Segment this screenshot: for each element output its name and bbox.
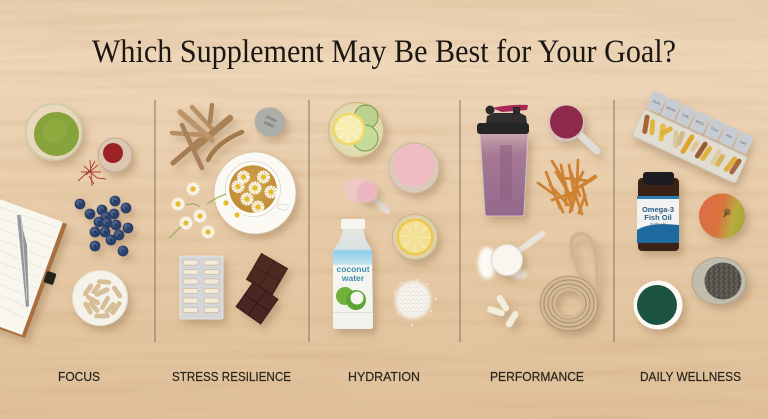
weekly pill organizer: SUN (652, 98, 661, 106)
omega-3 fish oil bottle: Fish Oil (644, 213, 672, 222)
coconut water bottle (333, 219, 373, 329)
weekly pill organizer: TUE (681, 112, 690, 120)
engraved stone: inner (265, 114, 278, 124)
cordyceps (538, 160, 596, 214)
label: stress resilience: STRESS RESILIENCE (172, 370, 291, 384)
panel: daily wellness (632, 90, 756, 384)
chamomile flowers (169, 185, 241, 238)
focus items (0, 104, 133, 338)
stress resilience items (169, 103, 296, 324)
hydration items (328, 102, 439, 329)
infused water glass (328, 102, 384, 158)
weekly pill organizer: MON (666, 105, 676, 113)
performance items (477, 104, 597, 329)
daily wellness items (632, 90, 756, 330)
matcha bowl (26, 104, 82, 160)
omega-3 fish oil bottle: Omega-3 (642, 205, 674, 214)
spirulina bowl (634, 280, 682, 330)
engraved stone (250, 103, 290, 141)
chia seed jar (692, 258, 746, 304)
pink powder scoop (345, 178, 387, 211)
weekly pill organizer: THU (710, 125, 719, 133)
panel: performance (477, 104, 597, 384)
white capsules (486, 294, 520, 328)
blueberries (75, 196, 133, 256)
title: Which Supplement May Be Best for Your Goal? (92, 34, 676, 70)
panel: stress resilience (169, 103, 296, 384)
omega-3 fish oil bottle: Softgels (650, 222, 667, 227)
saffron jar (98, 138, 132, 172)
ashwagandha roots (172, 105, 242, 168)
weekly pill organizer (632, 90, 756, 184)
creatine powder scoop (478, 234, 542, 279)
coconut water bottle: coconut (336, 264, 370, 274)
label: performance: PERFORMANCE (490, 370, 584, 384)
pink drink glass (389, 143, 439, 193)
divider lines (155, 100, 614, 342)
protein shaker (477, 105, 529, 216)
tea cup on saucer (214, 152, 296, 234)
panel: hydration (328, 102, 439, 384)
saffron threads (78, 160, 106, 186)
label: daily wellness: DAILY WELLNESS (640, 370, 741, 384)
sea salt (394, 279, 437, 326)
coconut water bottle: water (341, 273, 365, 283)
panel: focus (0, 104, 133, 384)
lemon slice in glass (392, 214, 438, 260)
label: hydration: HYDRATION (348, 370, 420, 384)
capsule bowl (72, 270, 128, 326)
resistance band (542, 234, 597, 329)
beet powder scoop (548, 104, 597, 151)
label: focus: FOCUS (58, 370, 100, 384)
omega-3 fish oil bottle (637, 172, 679, 251)
weekly pill organizer: FRI (725, 132, 733, 140)
weekly pill organizer: SAT (739, 139, 748, 147)
dark chocolate (236, 254, 287, 324)
engraved stone: calm (263, 120, 275, 130)
apple (699, 194, 745, 238)
notebook with pen (0, 192, 67, 338)
weekly pill organizer: WED (695, 118, 705, 127)
blister pack (180, 256, 223, 319)
